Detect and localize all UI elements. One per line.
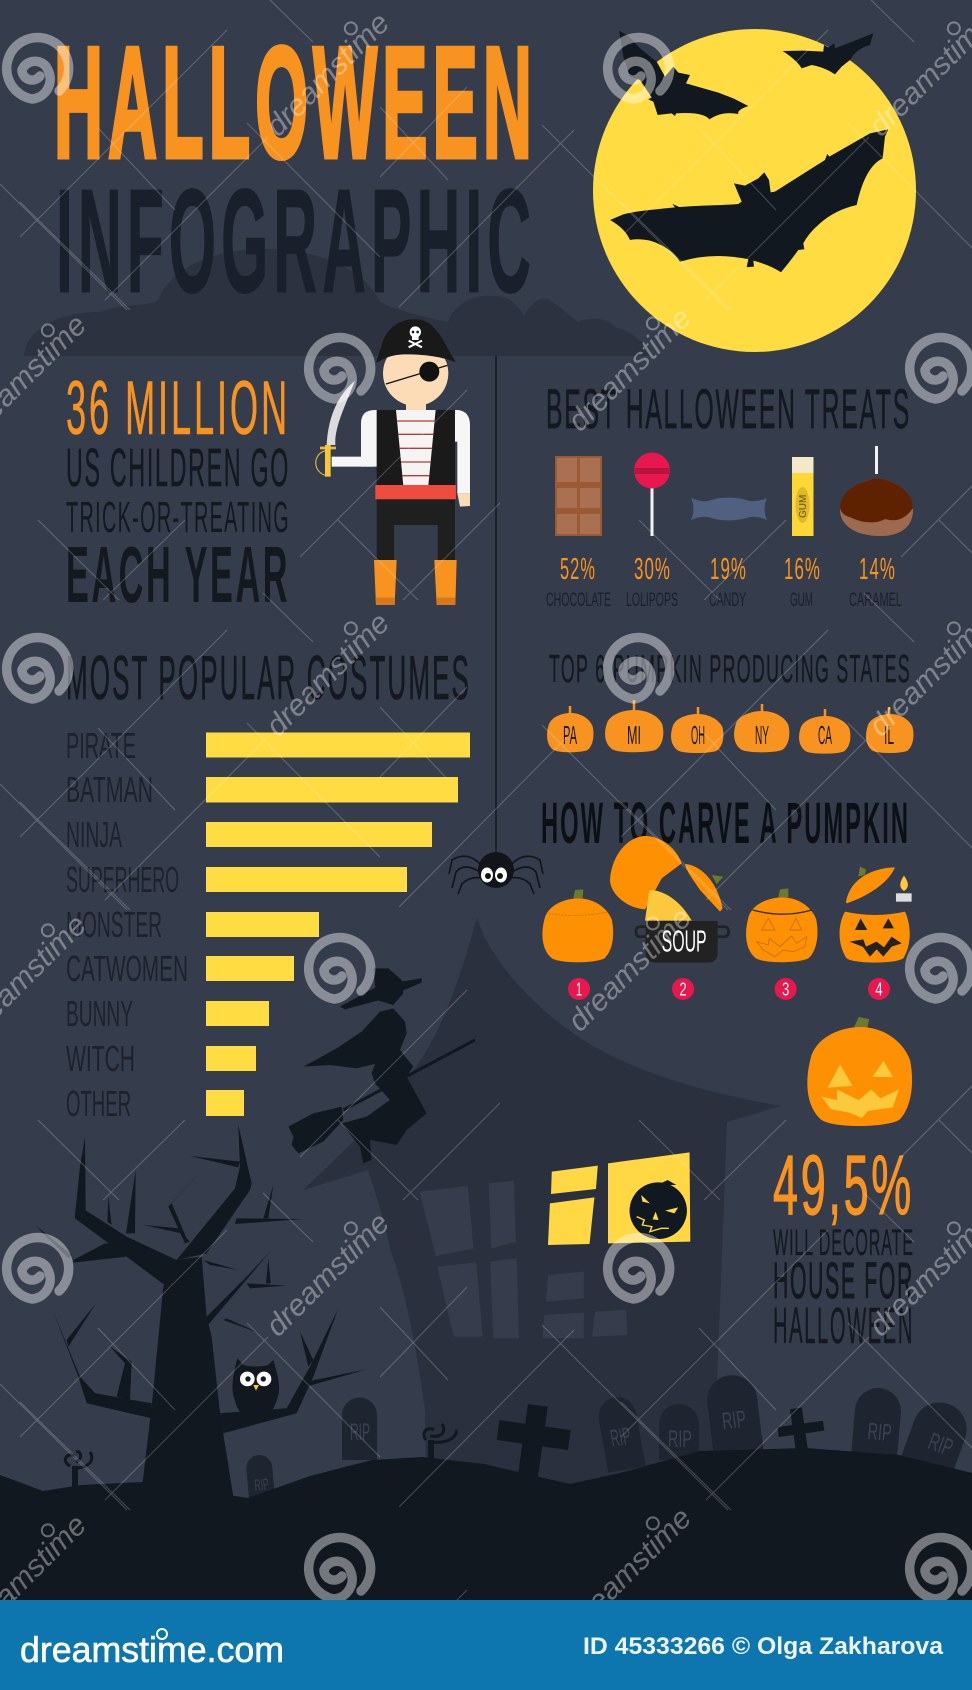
bar chart: costumes: [66, 725, 470, 1124]
step 2 scoop into soup: [610, 836, 729, 963]
icon: chocolate: [555, 456, 602, 536]
pumpkin states row: PA: [563, 720, 577, 750]
step 2 scoop into soup: SOUP: [662, 924, 707, 958]
stat: 36 million children: [66, 366, 290, 619]
treats panel: [546, 446, 913, 611]
costume labels: BUNNY: [66, 993, 133, 1034]
RIP inscriptions: RIP: [925, 1428, 956, 1462]
treat percentages: 16%: [784, 551, 821, 586]
costume labels: NINJA: [66, 814, 122, 855]
costume labels: BATMAN: [66, 769, 153, 810]
pumpkin states row: CA: [818, 720, 832, 750]
step numbers: 1: [576, 979, 582, 1000]
treat percentages: 14%: [859, 551, 896, 586]
treat percentages: 30%: [634, 551, 671, 586]
RIP inscriptions: RIP: [609, 1423, 633, 1453]
icon: lollipop: [634, 452, 670, 536]
infographic canvas: 36 MILLION: [66, 366, 290, 451]
watermark wordmarks: dreamstime: [260, 1206, 396, 1343]
step numbers: 2: [679, 979, 687, 1000]
step 4 carved pumpkin and candle: [840, 867, 912, 963]
costume labels: CATWOMEN: [66, 948, 188, 989]
costume labels: WITCH: [66, 1038, 135, 1079]
costume labels: PIRATE: [66, 725, 136, 766]
treat percentages: [560, 551, 896, 586]
icon: candy: [691, 498, 767, 520]
costume labels: MONSTER: [66, 904, 162, 945]
watermark wordmarks: dreamstime: [562, 901, 698, 1038]
RIP inscriptions: RIP: [867, 1418, 893, 1447]
icon: caramel apple: [840, 446, 913, 536]
pumpkin states row: OH: [691, 720, 705, 750]
pirate character: [316, 319, 470, 605]
treat percentages: 19%: [710, 551, 747, 586]
footer credit: ID 45333266 © Olga Zakharova: [583, 1633, 944, 1660]
witch on broom: [288, 968, 475, 1163]
small bat: [783, 33, 873, 74]
stat: 49.5 percent: [773, 1138, 914, 1354]
treat labels: CHOCOLATE: [546, 590, 611, 611]
RIP inscriptions: RIP: [254, 1476, 269, 1495]
RIP inscriptions: RIP: [721, 1406, 748, 1435]
pumpkin states row: NY: [755, 720, 769, 750]
RIP inscriptions: RIP: [668, 1426, 692, 1453]
infographic canvas: US CHILDREN GO: [66, 438, 290, 498]
ground hills: [0, 1448, 972, 1600]
treat labels: CARAMEL: [849, 590, 902, 611]
owl: [232, 1358, 279, 1417]
bats: [610, 31, 888, 272]
haunted house: [303, 918, 781, 1520]
big jack-o-lantern: [807, 1017, 912, 1126]
footer logo: dreamstime.com: [20, 1629, 284, 1670]
treat labels: CANDY: [709, 590, 746, 611]
watermark wordmarks: dreamstime: [260, 6, 396, 143]
large bat: [610, 129, 888, 272]
pumpkin states row: [547, 700, 913, 754]
medium bat: [619, 31, 748, 119]
costume labels: [66, 725, 188, 1124]
step numbers: 4: [875, 979, 883, 1000]
pumpkin silhouette in window: [630, 1180, 687, 1239]
treat percentages: 52%: [560, 551, 596, 586]
treat labels: [546, 590, 902, 611]
step 3 draw face: [746, 888, 817, 962]
pumpkin states row: IL: [884, 720, 894, 750]
watermark wordmarks: dreamstime: [562, 301, 698, 438]
treat labels: LOLIPOPS: [626, 590, 678, 611]
storm clouds: [24, 249, 650, 356]
crosses and zombie hands: [65, 1400, 827, 1490]
moon: [593, 29, 916, 352]
costume labels: SUPERHERO: [66, 859, 179, 900]
step 1 pumpkin: [542, 889, 613, 962]
costume labels: OTHER: [66, 1083, 131, 1124]
pirate sword: [316, 381, 355, 477]
watermark wordmarks: dreamstime: [260, 606, 396, 743]
treat labels: GUM: [790, 590, 813, 611]
footer bar: [0, 1600, 972, 1690]
icon: gum: GUM: [798, 495, 809, 518]
watermark wordmarks: dreamstime: [562, 1501, 698, 1638]
infographic canvas: EACH YEAR: [66, 530, 290, 619]
dead tree with owl: [35, 1125, 367, 1497]
graveyard stones: [245, 1372, 972, 1501]
step numbers: [568, 978, 890, 1000]
carving steps: [542, 836, 912, 1000]
footer spiral mark: [157, 1629, 167, 1639]
icon: gum: [792, 457, 814, 536]
divider thread: [495, 356, 497, 860]
step numbers: 3: [782, 979, 789, 1000]
spider: [449, 852, 543, 894]
RIP inscriptions: [254, 1406, 956, 1495]
RIP inscriptions: RIP: [350, 1419, 370, 1446]
lit and unlit windows: [420, 1152, 690, 1338]
infographic canvas: TRICK-OR-TREATING: [66, 493, 290, 542]
pumpkin states row: MI: [627, 720, 641, 750]
